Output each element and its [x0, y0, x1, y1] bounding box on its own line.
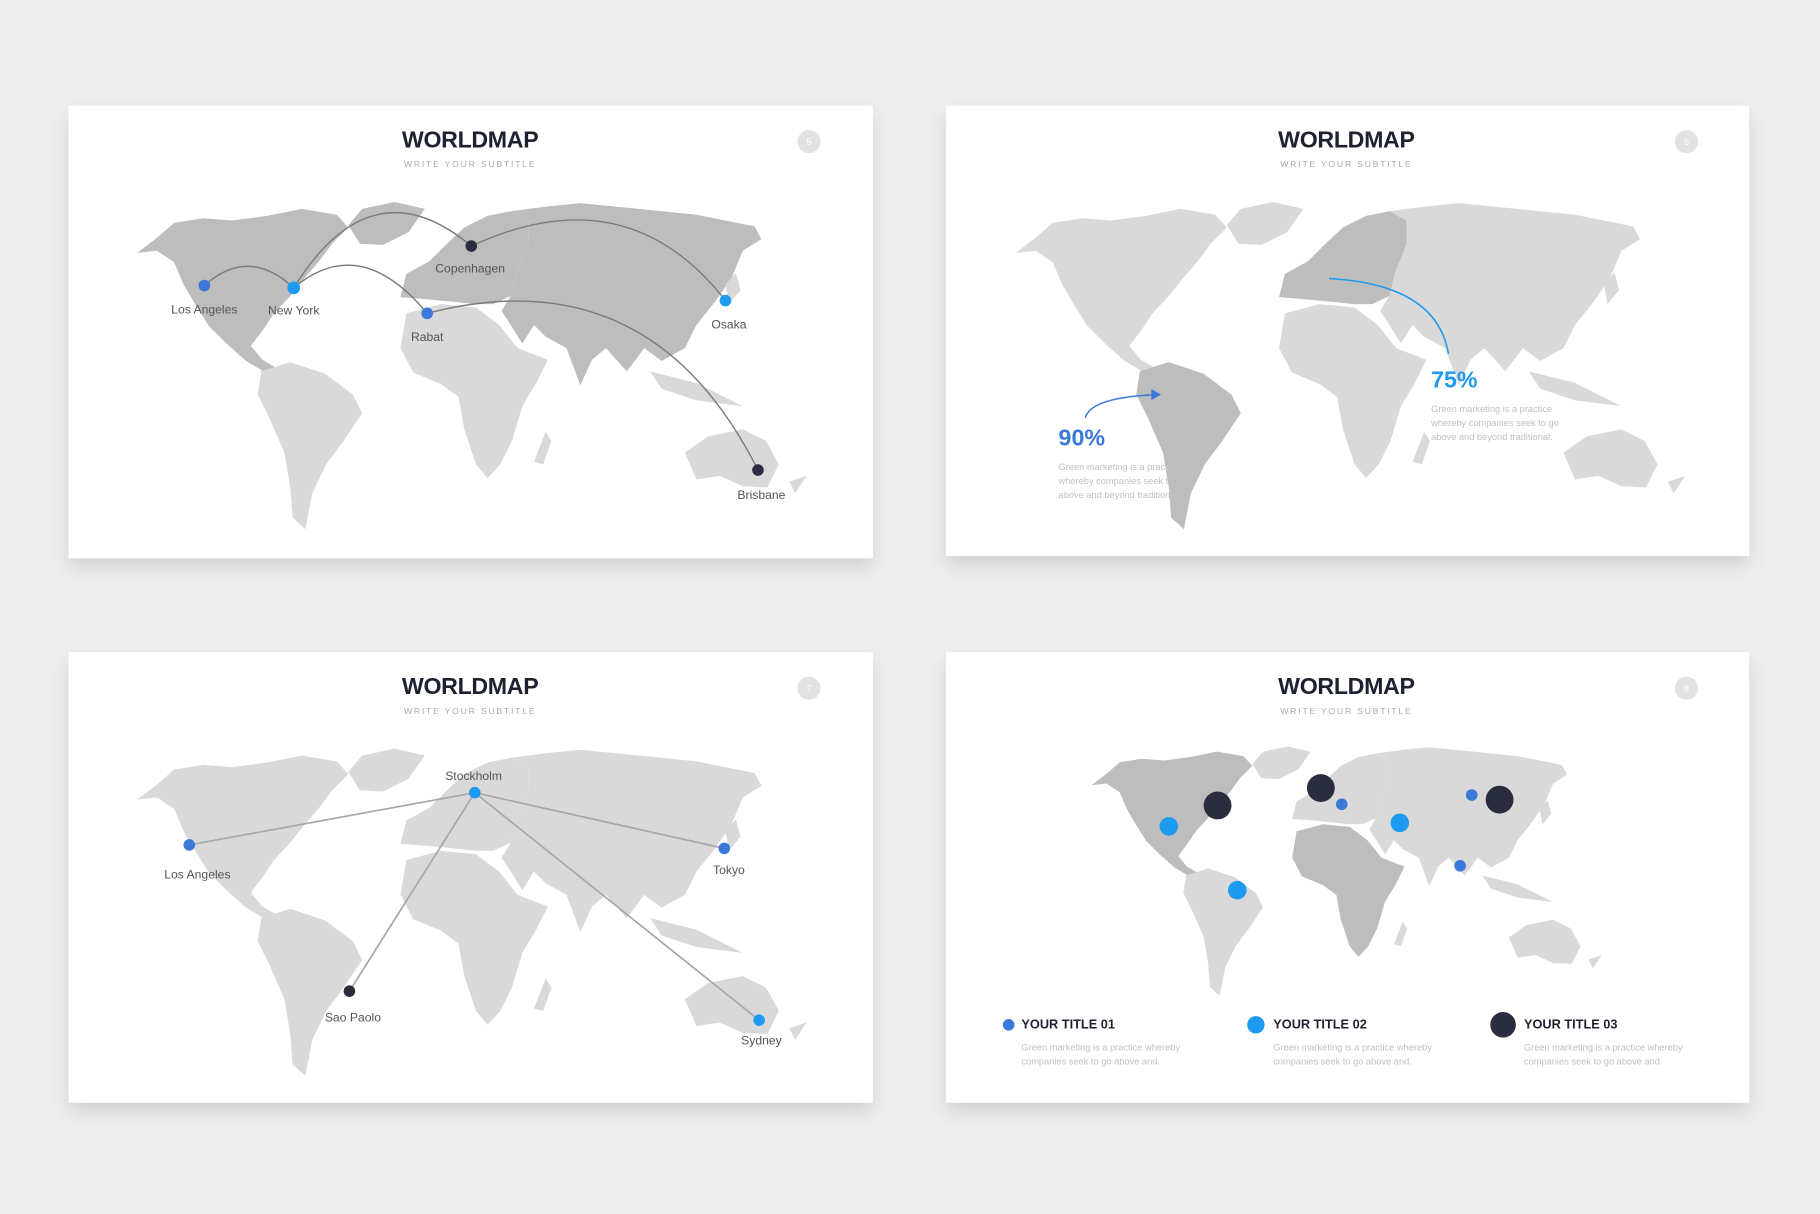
page number [797, 677, 821, 700]
legend item 03: companies seek to go above and. [1524, 1056, 1663, 1066]
city markers [199, 240, 764, 476]
title: WORLDMAP [402, 673, 538, 699]
arrow 75% [1329, 279, 1449, 354]
panel: top-right percentage map [946, 106, 1749, 556]
panel: top-left route map [69, 106, 873, 558]
stat 75%: Green marketing is a practice [1431, 404, 1552, 414]
subtitle: WRITE YOUR SUBTITLE [1280, 159, 1413, 169]
map [137, 202, 807, 529]
connection lines [189, 793, 759, 1020]
legend item 01: YOUR TITLE 01 [1021, 1016, 1115, 1031]
city labels: New York [268, 304, 320, 318]
stat 75%: whereby companies seek to go [1430, 418, 1559, 428]
subtitle: WRITE YOUR SUBTITLE [1280, 706, 1413, 716]
stat 75%: 75% [1431, 367, 1478, 393]
legend item 03: Green marketing is a practice whereby [1524, 1042, 1683, 1052]
city labels: Los Angeles [164, 868, 231, 882]
legend item 02 [1247, 1016, 1432, 1066]
city labels: Sao Paolo [325, 1010, 381, 1024]
route arcs [204, 213, 758, 470]
legend item 02: companies seek to go above and. [1273, 1056, 1412, 1066]
page number [1675, 677, 1698, 700]
page number: 7 [806, 684, 812, 694]
title: WORLDMAP [402, 126, 538, 152]
city labels: Copenhagen [435, 262, 505, 276]
map [1091, 746, 1602, 996]
subtitle: WRITE YOUR SUBTITLE [404, 159, 536, 169]
page number: 8 [1684, 684, 1689, 694]
city labels: Stockholm [445, 769, 502, 783]
legend item 01 [1003, 1016, 1180, 1066]
city markers [183, 787, 765, 1026]
city labels: Osaka [711, 317, 747, 331]
legend item 01: companies seek to go above and. [1021, 1056, 1160, 1066]
panel: bottom-left connection map [69, 652, 873, 1103]
city labels: Rabat [411, 330, 444, 344]
panel: bottom-right bubble map [946, 652, 1749, 1103]
stat 75% [1430, 367, 1559, 442]
stat 90%: above and beyond traditional. [1059, 490, 1180, 500]
stat 90%: Green marketing is a practice [1059, 462, 1180, 472]
page number: 6 [1684, 137, 1689, 147]
page number [797, 130, 821, 153]
stat 90%: whereby companies seek to go [1058, 476, 1186, 486]
city labels: Tokyo [713, 863, 745, 877]
legend item 02: Green marketing is a practice whereby [1273, 1042, 1432, 1052]
stat 90%: 90% [1059, 425, 1105, 451]
city labels: Brisbane [737, 488, 786, 502]
page number [1675, 130, 1698, 153]
legend item 02: YOUR TITLE 02 [1273, 1016, 1367, 1031]
title: WORLDMAP [1278, 673, 1415, 699]
legend item 03 [1490, 1012, 1683, 1066]
arrow 90% [1085, 390, 1160, 418]
subtitle: WRITE YOUR SUBTITLE [404, 706, 536, 716]
legend item 01: Green marketing is a practice whereby [1021, 1042, 1180, 1052]
stat 90% [1058, 425, 1186, 500]
stat 75%: above and beyond traditional. [1431, 432, 1553, 442]
city labels: Los Angeles [171, 302, 238, 316]
page number: 5 [806, 137, 812, 147]
city labels [171, 262, 786, 502]
map [1016, 202, 1685, 529]
title: WORLDMAP [1278, 126, 1415, 152]
city labels [164, 769, 783, 1048]
legend item 03: YOUR TITLE 03 [1524, 1016, 1617, 1031]
map [137, 749, 807, 1076]
bubbles [1160, 774, 1514, 899]
city labels: Sydney [741, 1034, 783, 1048]
